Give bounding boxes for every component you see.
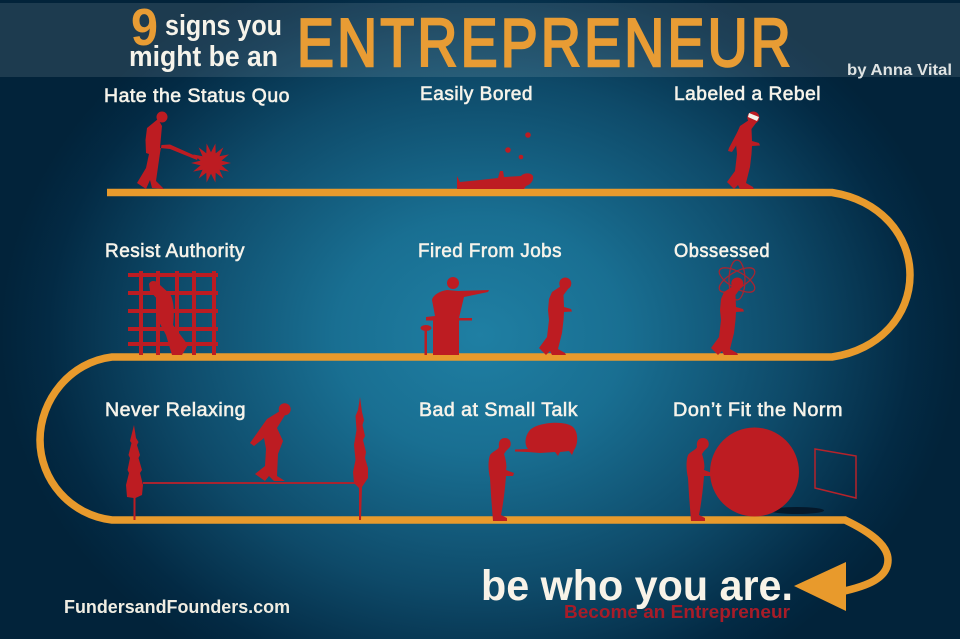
winding orange road <box>40 192 910 592</box>
title <box>129 0 794 81</box>
title line one: signs you <box>165 10 282 42</box>
sign 2: Easily Bored <box>420 83 533 189</box>
label: Easily Bored <box>420 83 533 105</box>
walking figure <box>539 278 572 355</box>
square frame <box>815 449 856 498</box>
label: Resist Authority <box>105 240 245 262</box>
title main word: ENTREPRENEUR <box>297 5 794 81</box>
header band <box>0 3 960 77</box>
arrow head <box>794 562 846 611</box>
figure pushing large circle toward small frame <box>686 428 856 521</box>
figure with atom around head <box>711 260 758 355</box>
label: Don’t Fit the Norm <box>673 399 843 421</box>
figure behind grid <box>128 271 218 355</box>
boss at podium pointing <box>420 277 489 355</box>
sign 4: Resist Authority <box>105 240 245 355</box>
label: Obssessed <box>674 240 770 262</box>
sign 8: Bad at Small Talk <box>419 399 578 521</box>
numeral nine: 9 <box>131 0 158 57</box>
sign 3: Labeled a Rebel <box>674 83 821 189</box>
ground shadow <box>770 507 824 514</box>
tightrope walker between trees <box>126 397 368 520</box>
sign 6: Obssessed <box>674 240 770 355</box>
title line two: might be an <box>129 41 278 73</box>
sign 1: Hate the Status Quo <box>104 85 290 189</box>
website credit: FundersandFounders.com <box>64 596 290 617</box>
figure pushing spiked ball <box>137 112 231 189</box>
lying figure with dots <box>457 132 533 189</box>
sign 9: Don't Fit the Norm <box>673 399 856 521</box>
closing message: be who you are. <box>481 562 793 610</box>
label: Never Relaxing <box>105 399 246 421</box>
label: Bad at Small Talk <box>419 399 578 421</box>
byline: by Anna Vital <box>847 62 952 79</box>
label: Hate the Status Quo <box>104 85 290 107</box>
sign 7: Never Relaxing <box>105 397 368 520</box>
closing subtitle: Become an Entrepreneur <box>564 602 790 622</box>
label: Labeled a Rebel <box>674 83 821 105</box>
sign 5: Fired From Jobs <box>418 240 572 355</box>
walking figure with white headband <box>727 112 760 189</box>
figure with speech blob <box>488 423 577 521</box>
label: Fired From Jobs <box>418 240 562 262</box>
